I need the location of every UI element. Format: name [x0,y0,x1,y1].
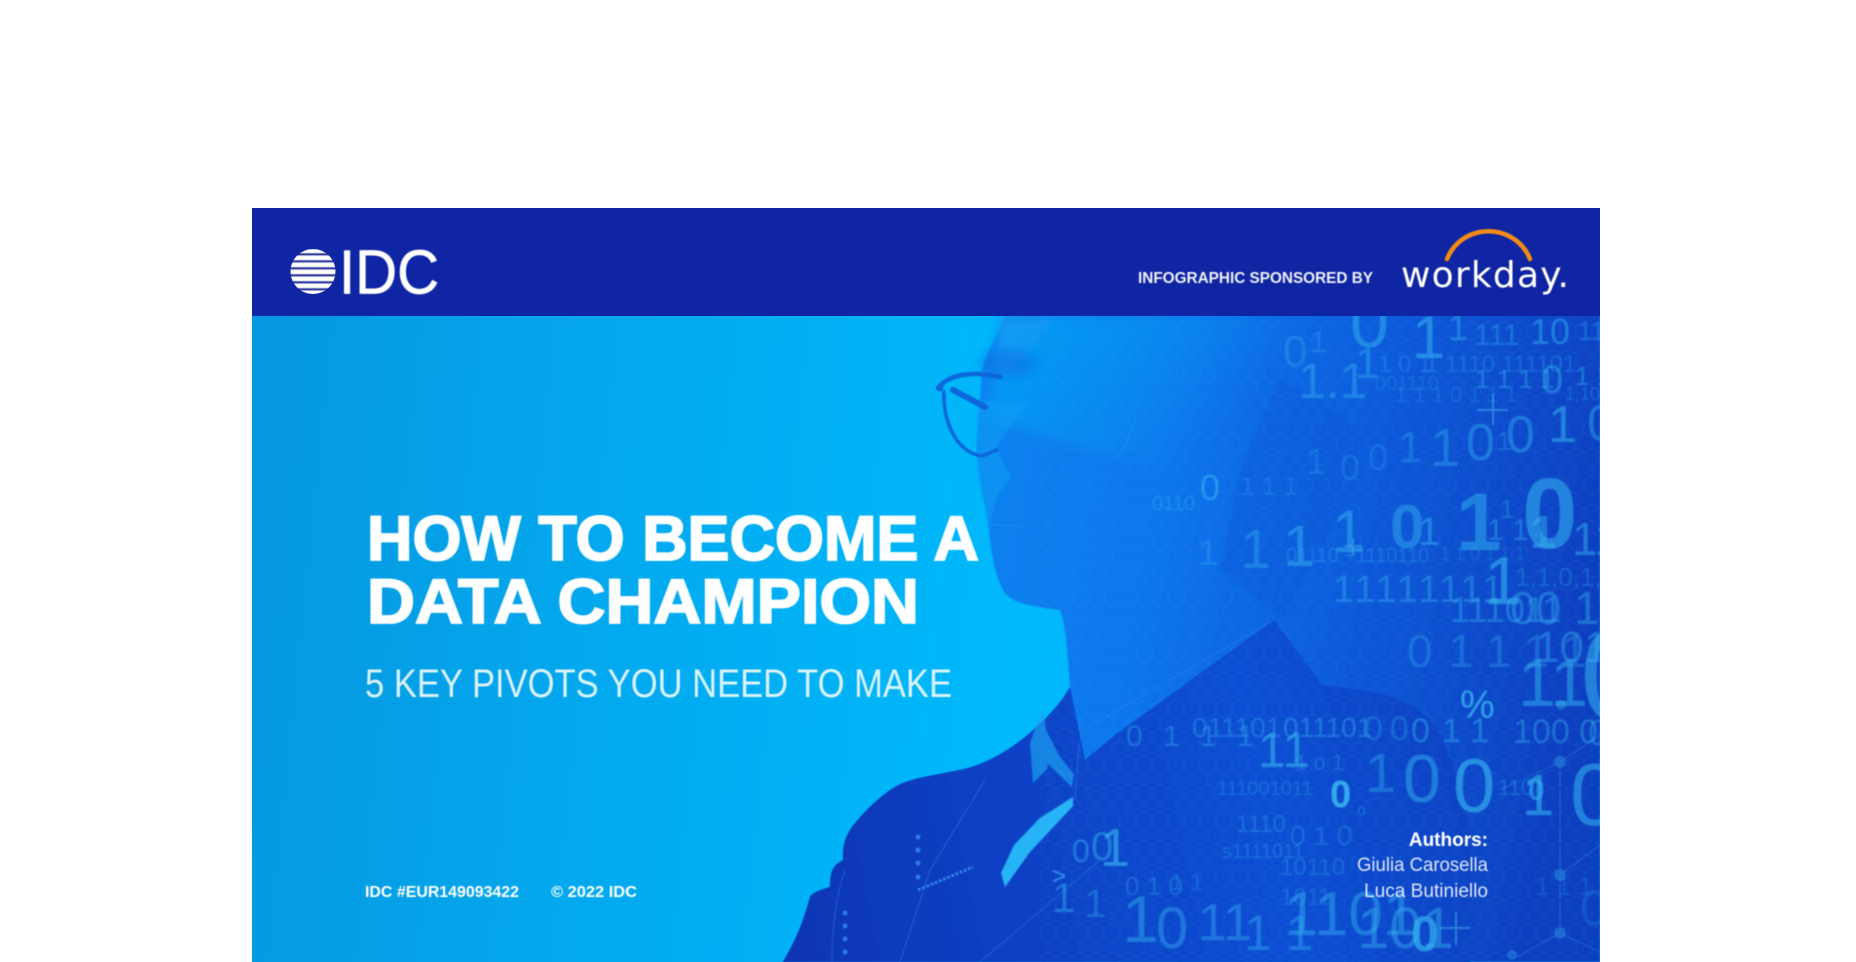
binary digits overlay: 00 [1364,710,1416,748]
jacket: dotted data marks [842,834,973,954]
binary digits overlay: 11 [1578,316,1605,346]
binary digits overlay: 0 [1091,825,1113,869]
binary digits overlay: 11 [1258,722,1310,778]
panel: hero background [252,316,1600,962]
binary digits overlay: 1 [1430,418,1460,478]
highlight: top of head glow [990,316,1236,448]
binary digits overlay: 1 [1084,882,1106,926]
binary digits overlay: 1 [1497,426,1511,456]
binary digits overlay: 01110 +1110110 [1286,545,1429,567]
network graphic [1500,700,1600,960]
binary digits overlay: s1111011 [1222,841,1304,863]
title line 2: DATA CHAMPION [367,567,919,637]
binary digits overlay: 0 [1156,896,1188,961]
binary digits overlay: 0 1 0 [1125,871,1183,901]
binary digits overlay: 0 [1411,906,1439,962]
binary digits overlay: 1 0 1 [1378,351,1431,378]
binary digits overlay: 1 [1306,441,1326,482]
binary digits overlay [1052,316,1600,952]
binary digits overlay: 11 [1198,894,1252,952]
binary digits overlay: 1 [1122,882,1159,956]
binary digits overlay: % [1460,684,1495,727]
binary digits overlay: 011101 [1283,712,1372,743]
icon: eyeglasses [936,374,1000,456]
binary digits overlay: 0110 [1152,493,1195,515]
sponsor wordmark: workday. [1401,255,1569,296]
binary digits overlay: 1 [1500,494,1514,524]
binary digits overlay: 11111111 [1333,569,1503,611]
binary digits overlay: 0 [1588,712,1608,753]
binary digits overlay: 111 [1474,319,1520,352]
binary digits overlay: 011101 [1192,712,1281,743]
binary digits overlay: 01111 [1407,625,1587,677]
binary digits overlay: 0 [1453,744,1495,829]
binary digits overlay: 0 [1340,447,1360,488]
binary digits overlay: 1 [1198,532,1218,573]
binary digits overlay: 111011 [1450,589,1562,630]
binary digits overlay: 0 [1541,358,1563,402]
face: profile details [1126,416,1136,444]
title line 1: HOW TO BECOME A [367,504,979,574]
binary digits overlay: 0 [1330,774,1351,816]
highlight: face edge behind lens [978,400,1012,522]
binary digits overlay: 0 [1506,406,1535,464]
binary digits overlay: 1 1 [1575,361,1611,391]
binary digits overlay: 0 [1390,493,1424,562]
binary digits overlay: 1101 [1284,880,1417,949]
binary digits overlay: 0 [1528,774,1545,807]
silhouette: torso and jacket [783,620,1475,962]
header bar [252,208,1600,316]
binary digits overlay: 0 [1200,467,1220,508]
title [367,504,979,637]
binary digits overlay: 0 [1350,284,1389,362]
copyright: © 2022 IDC [551,884,637,901]
binary digits overlay: 1 1 1 [1535,871,1593,901]
binary digits overlay: 0 [1580,880,1608,936]
binary digits overlay: 1 [1518,645,1556,721]
binary digits overlay: 1 [1283,514,1315,579]
binary digits overlay: 1 [1100,818,1130,878]
header background [252,208,1600,316]
binary digits overlay: 1 [1398,423,1422,472]
binary digits overlay: 101 [1535,623,1608,672]
binary digits overlay: 1 [1052,874,1075,921]
logo wordmark: IDC [339,238,439,308]
authors block [1357,830,1488,902]
binary digits overlay: 1,1,0,1,1 [1515,562,1616,592]
binary digits overlay: 1 [1548,396,1577,454]
binary digits overlay: 0 [1368,437,1388,478]
document reference: IDC #EUR149093422 [365,884,519,901]
binary digits overlay: 1 1 [1244,905,1314,961]
binary digits overlay: 1 [1530,506,1556,558]
binary digits overlay: 0 1 1 1 [1126,720,1260,753]
shading: brow [980,351,1036,377]
binary digits overlay: 1 [1448,307,1468,348]
author 2: Luca Butiniello [1364,881,1488,902]
icon: orange arc [1447,231,1530,259]
binary digits overlay: 00 1 10 [1510,582,1663,634]
binary digits overlay: 1 [1412,304,1445,371]
binary digits overlay: 1 1110 111101 [1425,351,1576,378]
authors heading: Authors: [1409,830,1488,851]
author 1: Giulia Carosella [1357,855,1488,876]
subtitle: 5 KEY PIVOTS YOU NEED TO MAKE [365,662,952,706]
infographic cover canvas [252,208,1600,962]
binary digits overlay: 1 [1550,645,1588,721]
hexagon texture [1040,316,1600,962]
binary digits overlay: 0 [1522,458,1578,570]
binary digits overlay: 1 1 0 1 1 1 [1440,544,1525,564]
binary digits overlay: 1 1 1 0 1 1 1 [1395,382,1517,407]
binary digits overlay: 1 [1484,543,1522,619]
binary digits overlay: 1,10 [1565,384,1600,404]
icon: striped globe [290,249,336,295]
binary digits overlay: 011 [1411,712,1501,750]
illustration: person silhouette and data overlay [782,316,1600,962]
binary digits overlay: 1 [1310,326,1327,359]
binary digits overlay: 1 1 [1170,869,1203,896]
binary digits overlay: 0 [1587,395,1615,451]
binary digits overlay: 1 [1522,763,1554,828]
binary digits overlay: 111001011 [1217,778,1313,800]
silhouette: head top soft edge [994,316,1004,338]
binary digits overlay: 0 [1580,602,1652,748]
binary digits overlay: 0 [1466,414,1495,472]
shirt: visible strip [1001,797,1073,887]
binary digits overlay: 1 [1355,339,1379,388]
binary digits overlay: 1 1 1 1 [1475,364,1555,394]
binary digits overlay: 0 [1570,745,1619,844]
binary digits overlay: 001110 [1375,373,1439,395]
binary digits overlay: 1 [1240,517,1271,580]
binary digits overlay: 111 [1572,513,1642,565]
binary digits overlay: 0 [1283,327,1307,376]
binary digits overlay: 1110 [1236,811,1286,838]
binary digits overlay: 100 0 [1513,713,1598,751]
binary digits overlay: 1 [1456,477,1502,568]
binary digits overlay: 1 [1332,498,1365,565]
binary digits overlay: > [1052,863,1066,890]
sponsor label: INFOGRAPHIC SPONSORED BY [1138,270,1373,287]
binary digits overlay: 1 o 1 [1295,750,1344,775]
icon: plus signs [1345,394,1508,945]
binary digits overlay: 1011 [1280,884,1332,911]
binary digits overlay: 1 1 [1487,514,1529,547]
binary digits overlay: 1 1 1 [1240,471,1298,501]
binary digits overlay: 101 [1357,896,1454,961]
binary digits overlay: 1 [1365,741,1396,804]
shirt: collar [1030,707,1074,787]
silhouette: head and background blue [783,300,1600,962]
binary digits overlay: 0 [1403,741,1441,817]
silhouette: back of head [1224,472,1244,570]
jacket: lapel highlights [832,620,1274,962]
binary digits overlay: 110 [1498,775,1533,800]
logo: Workday [1401,231,1569,296]
binary digits overlay: 10110 [1280,854,1345,881]
binary digits overlay: 10 [1530,311,1570,352]
binary digits overlay: 0 1 0 [1290,820,1352,851]
binary digits overlay: 1 [1418,510,1440,554]
binary digits overlay: 1.1 [1298,353,1368,409]
logo: IDC [290,248,438,296]
binary digits overlay: o [1357,802,1366,819]
binary digits overlay: 0 [1072,833,1090,869]
